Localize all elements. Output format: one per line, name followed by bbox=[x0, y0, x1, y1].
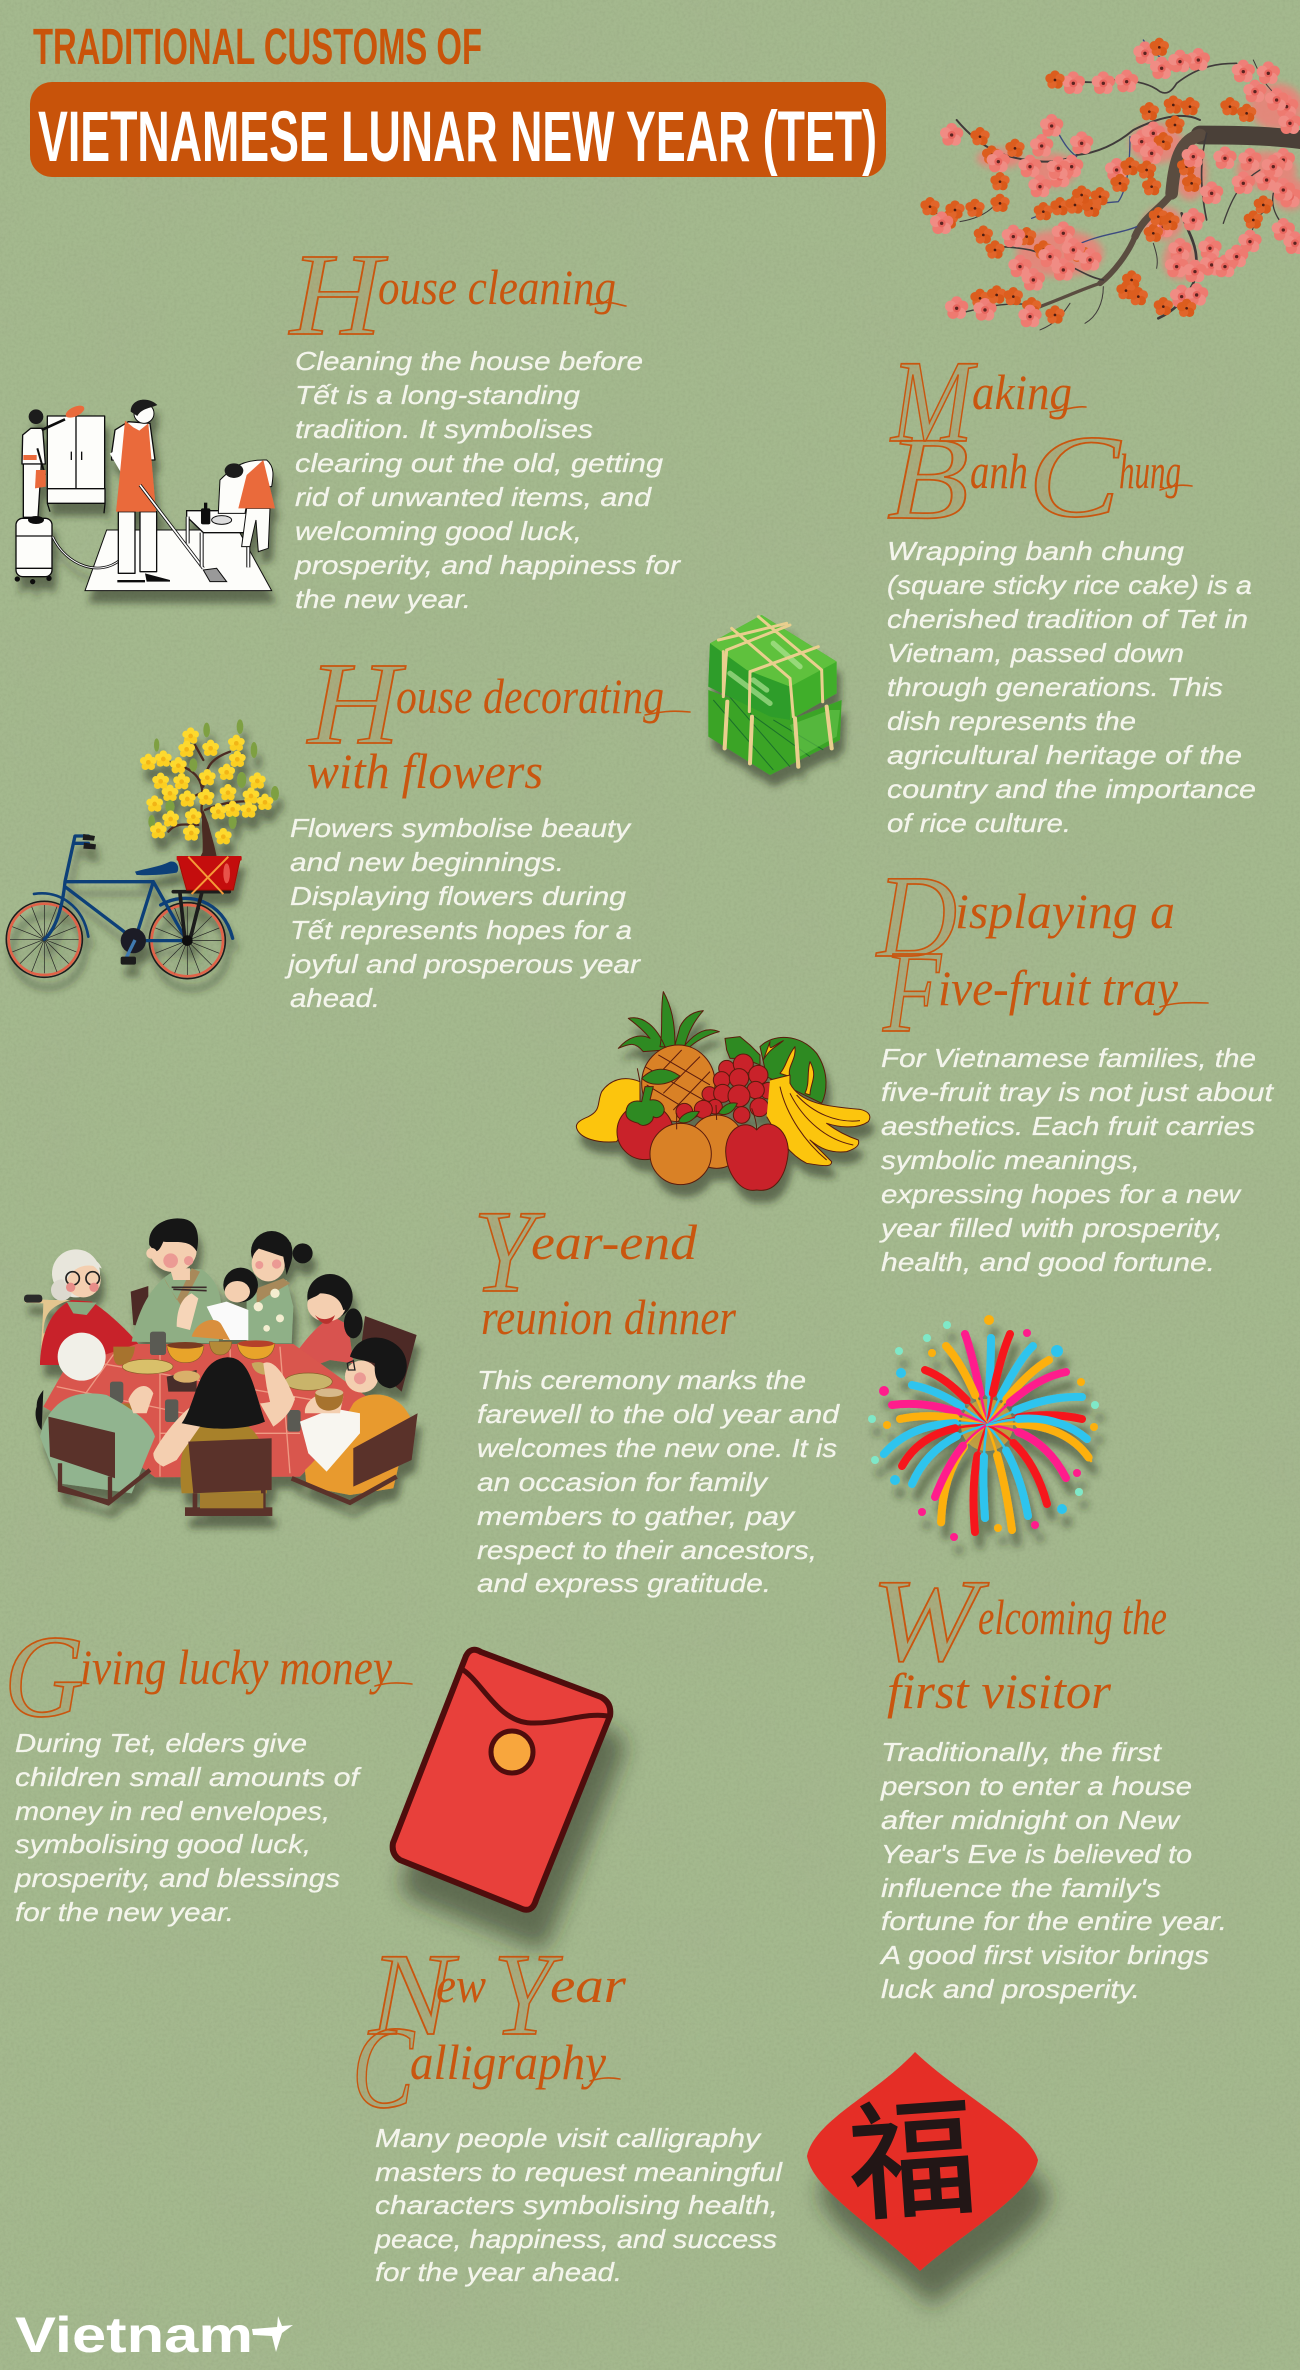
icon: fireworks bbox=[868, 1315, 1099, 1541]
text: calligraphy: Many people visit calligraphy bbox=[375, 2123, 762, 2153]
heading: displaying a five-fruit tray: D bbox=[875, 851, 957, 982]
heading: making banh chung: hung bbox=[1119, 443, 1181, 499]
heading: welcoming the first visitor bbox=[871, 1555, 1167, 1719]
heading: new year calligraphy: ear bbox=[550, 1957, 627, 2013]
text: first visitor: luck and prosperity. bbox=[881, 1974, 1140, 2004]
heading: new year calligraphy: N bbox=[368, 1929, 460, 2060]
text: making banh chung: Wrapping banh chung bbox=[887, 536, 1185, 566]
text: first visitor: fortune for the entire year. bbox=[881, 1906, 1227, 1936]
text: lucky money: During Tet, elders give bbox=[15, 1728, 307, 1758]
text: five-fruit tray: symbolic meanings, bbox=[881, 1145, 1140, 1175]
text: reunion dinner: welcomes the new one. It is bbox=[477, 1433, 837, 1463]
heading: making banh chung: aking bbox=[972, 364, 1072, 420]
panel: lucky money bbox=[4, 1611, 610, 1927]
text: house cleaning: welcoming good luck, bbox=[295, 516, 582, 546]
icon: banh chung bbox=[708, 615, 842, 775]
text: first visitor: after midnight on New bbox=[881, 1805, 1182, 1835]
heading: making banh chung: B bbox=[887, 413, 969, 544]
text: first visitor: Traditionally, the first bbox=[881, 1737, 1163, 1767]
heading: giving lucky money: G bbox=[4, 1611, 84, 1742]
heading: house cleaning: H bbox=[288, 229, 388, 360]
text: house decorating: joyful and prosperous year bbox=[285, 949, 642, 979]
panel: reunion dinner bbox=[24, 1186, 841, 1598]
text: making banh chung bbox=[887, 536, 1256, 838]
panel: making banh chung bbox=[708, 336, 1256, 838]
text: lucky money: children small amounts of bbox=[15, 1762, 362, 1792]
heading: house decorating with flowers: H bbox=[306, 638, 406, 769]
title banner bbox=[30, 82, 886, 177]
logo: Vietnam+ bbox=[15, 2307, 293, 2363]
text: reunion dinner: This ceremony marks the bbox=[477, 1365, 806, 1395]
panel: calligraphy bbox=[352, 1929, 1038, 2287]
icon: people cleaning the house bbox=[15, 400, 275, 591]
text: house decorating: Displaying flowers during bbox=[290, 881, 627, 911]
text: five-fruit tray: aesthetics. Each fruit carries bbox=[881, 1111, 1255, 1141]
panel: house decorating with flowers bbox=[6, 638, 690, 1013]
text: house decorating: Flowers symbolise beauty bbox=[290, 813, 632, 843]
heading: new year calligraphy: ew bbox=[436, 1957, 486, 2013]
icon: red envelope bbox=[393, 1650, 610, 1910]
text: house decorating: ahead. bbox=[290, 983, 380, 1013]
heading: making banh chung: anh bbox=[970, 443, 1028, 499]
text: reunion dinner bbox=[477, 1365, 841, 1598]
text: reunion dinner: an occasion for family bbox=[477, 1467, 769, 1497]
text: house cleaning: tradition. It symbolises bbox=[295, 414, 593, 444]
heading: making banh chung: M bbox=[889, 336, 978, 467]
text: making banh chung: agricultural heritage of the bbox=[887, 740, 1242, 770]
text: house cleaning: prosperity, and happiness for bbox=[294, 550, 682, 580]
text: reunion dinner: respect to their ancestors, bbox=[477, 1535, 817, 1565]
text: house decorating bbox=[285, 813, 642, 1013]
text: making banh chung: of rice culture. bbox=[887, 808, 1071, 838]
logo: Vietnam+: Vietnam bbox=[15, 2307, 253, 2363]
icon: five fruits bbox=[576, 992, 870, 1190]
text: house decorating: Tết represents hopes for a bbox=[290, 915, 632, 945]
text: making banh chung: Vietnam, passed down bbox=[887, 638, 1184, 668]
heading: displaying a five-fruit tray bbox=[875, 851, 1208, 1057]
text: house cleaning: Tết is a long-standing bbox=[295, 380, 581, 410]
text: house cleaning: clearing out the old, getting bbox=[295, 448, 664, 478]
heading: year-end reunion dinner bbox=[473, 1186, 736, 1345]
text: lucky money bbox=[14, 1728, 362, 1927]
panel: first visitor bbox=[871, 1555, 1227, 2004]
text: house cleaning bbox=[294, 346, 682, 614]
heading: house decorating with flowers: with flowers bbox=[307, 743, 543, 799]
text: calligraphy bbox=[374, 2123, 783, 2287]
text: five-fruit tray: year filled with prosperity, bbox=[879, 1213, 1223, 1243]
icon: fu diamond: 福 bbox=[841, 2054, 982, 2247]
text: house decorating: and new beginnings. bbox=[290, 847, 564, 877]
heading: year-end reunion dinner: ear-end bbox=[531, 1214, 698, 1270]
heading: new year calligraphy bbox=[352, 1929, 627, 2133]
text: five-fruit tray: For Vietnamese families, the bbox=[881, 1043, 1256, 1073]
text: house cleaning: Cleaning the house before bbox=[295, 346, 643, 376]
heading: displaying a five-fruit tray: isplaying a bbox=[955, 883, 1175, 939]
heading: displaying a five-fruit tray: ive-fruit tray bbox=[938, 960, 1179, 1016]
icon: fu diamond bbox=[807, 2052, 1038, 2271]
text: lucky money: for the new year. bbox=[15, 1897, 234, 1927]
text: making banh chung: through generations. This bbox=[887, 672, 1223, 702]
text: house cleaning: rid of unwanted items, and bbox=[295, 482, 653, 512]
text: house cleaning: the new year. bbox=[295, 584, 471, 614]
text: five-fruit tray: five-fruit tray is not just about bbox=[881, 1077, 1275, 1107]
icon: family at reunion dinner table bbox=[24, 1218, 418, 1516]
text: lucky money: prosperity, and blessings bbox=[14, 1863, 340, 1893]
text: first visitor: person to enter a house bbox=[880, 1771, 1192, 1801]
text: five-fruit tray bbox=[879, 1043, 1275, 1277]
text: calligraphy: peace, happiness, and success bbox=[374, 2224, 777, 2254]
heading: welcoming the first visitor: W bbox=[871, 1555, 990, 1686]
text: making banh chung: country and the importance bbox=[887, 774, 1256, 804]
heading: giving lucky money: iving lucky money bbox=[80, 1639, 393, 1695]
heading: year-end reunion dinner: reunion dinner bbox=[481, 1289, 736, 1345]
text: calligraphy: characters symbolising health, bbox=[375, 2190, 778, 2220]
heading: displaying a five-fruit tray: F bbox=[882, 926, 943, 1057]
text: five-fruit tray: health, and good fortune. bbox=[881, 1247, 1215, 1277]
text: reunion dinner: members to gather, pay bbox=[477, 1501, 796, 1531]
panel: five-fruit tray bbox=[576, 851, 1275, 1277]
icon: bicycle with apricot blossom tree bbox=[6, 719, 279, 979]
text: first visitor bbox=[879, 1737, 1227, 2004]
text: first visitor: A good first visitor brings bbox=[879, 1940, 1209, 1970]
heading: house cleaning bbox=[288, 229, 626, 360]
text: lucky money: money in red envelopes, bbox=[15, 1796, 330, 1826]
illustration: cherry blossom branch bbox=[920, 38, 1300, 330]
text: reunion dinner: and express gratitude. bbox=[477, 1568, 771, 1598]
text: five-fruit tray: expressing hopes for a new bbox=[881, 1179, 1243, 1209]
title bbox=[30, 18, 886, 177]
text: making banh chung: dish represents the bbox=[887, 706, 1136, 736]
heading: house cleaning: ouse cleaning bbox=[378, 259, 616, 315]
heading: making banh chung bbox=[887, 336, 1192, 544]
text: calligraphy: for the year ahead. bbox=[375, 2257, 622, 2287]
text: first visitor: Year's Eve is believed to bbox=[881, 1839, 1192, 1869]
heading: welcoming the first visitor: first visitor bbox=[887, 1663, 1112, 1719]
text: making banh chung: cherished tradition of Tet in bbox=[887, 604, 1248, 634]
text: first visitor: influence the family's bbox=[881, 1873, 1161, 1903]
text: calligraphy: masters to request meaningful bbox=[375, 2157, 783, 2187]
panel: house cleaning bbox=[15, 229, 682, 614]
text: making banh chung: (square sticky rice cake) is a bbox=[887, 570, 1252, 600]
heading: new year calligraphy: Y bbox=[493, 1929, 563, 2060]
heading: house decorating with flowers: ouse decorating bbox=[396, 668, 664, 724]
title kicker: TRADITIONAL CUSTOMS OF bbox=[33, 18, 482, 75]
text: lucky money: symbolising good luck, bbox=[15, 1829, 311, 1859]
heading: making banh chung: C bbox=[1028, 411, 1121, 542]
heading: new year calligraphy: C bbox=[352, 2002, 415, 2133]
heading: welcoming the first visitor: elcoming the bbox=[978, 1589, 1167, 1645]
text: reunion dinner: farewell to the old year and bbox=[477, 1399, 841, 1429]
heading: house decorating with flowers bbox=[306, 638, 690, 799]
heading: year-end reunion dinner: Y bbox=[473, 1186, 546, 1317]
heading: giving lucky money bbox=[4, 1611, 412, 1742]
heading: new year calligraphy: alligraphy bbox=[410, 2034, 607, 2090]
